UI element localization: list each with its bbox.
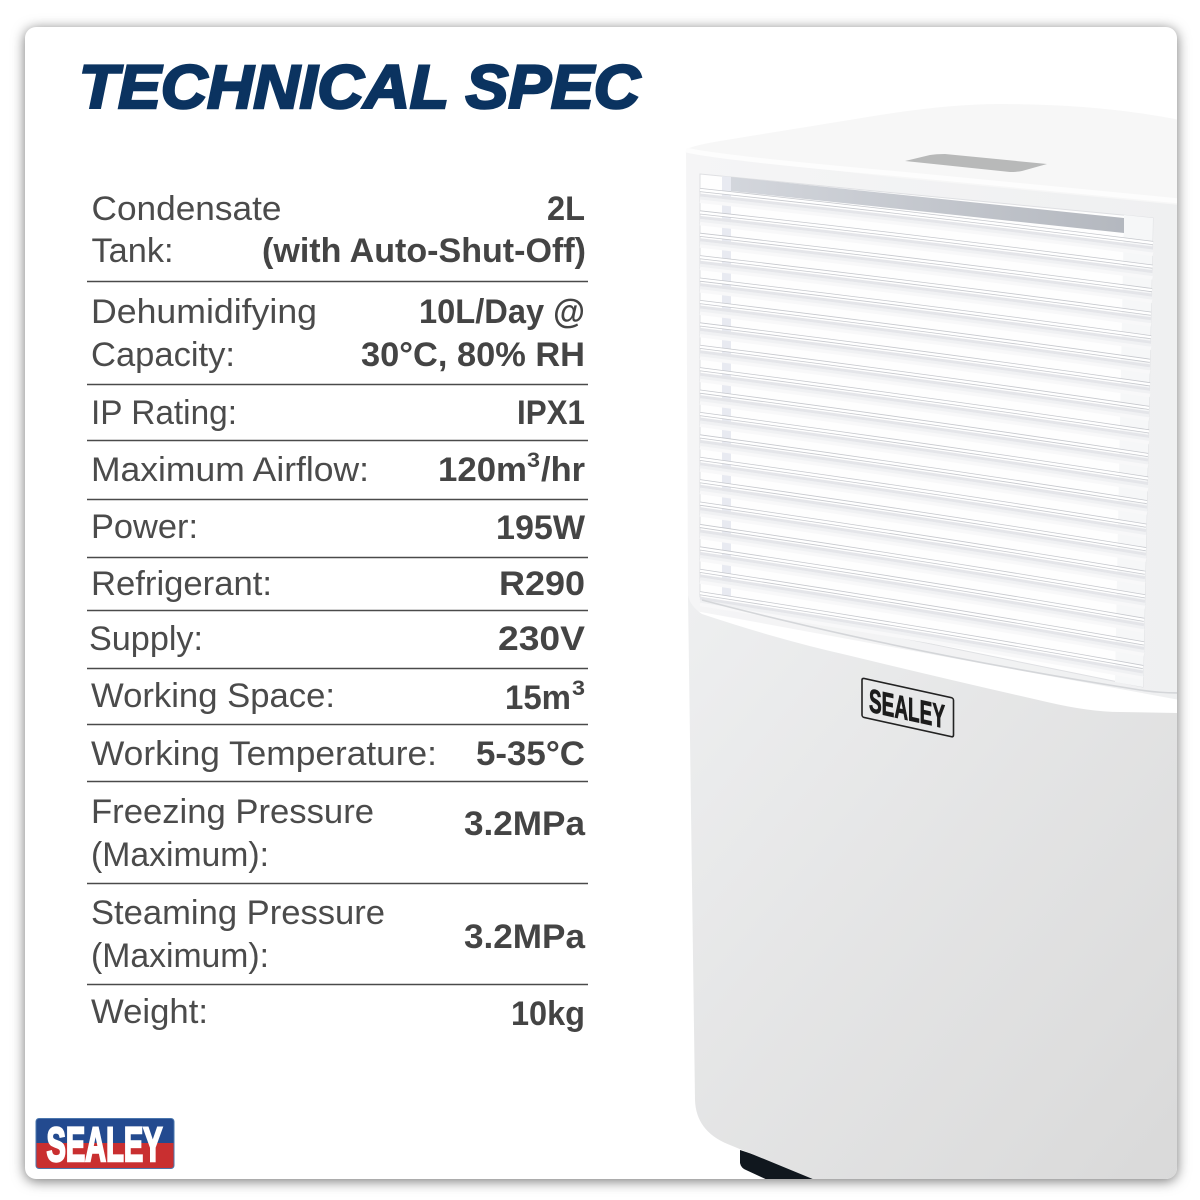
row: supply: 230V — [498, 620, 585, 658]
row: weight: Weight: — [91, 993, 208, 1031]
row: freezing pressure: 3.2MPa — [464, 805, 586, 843]
row: steaming pressure: 3.2MPa — [464, 918, 586, 956]
grille window — [731, 177, 1124, 233]
logo: SEALEY — [36, 1118, 174, 1172]
logo: SEALEY: SEALEY — [46, 1119, 162, 1172]
row: dehumidifying capacity: 30°C, 80% RH — [361, 336, 585, 374]
lid front edge — [687, 151, 810, 168]
row: condensate tank: Tank: — [92, 232, 174, 270]
row: supply: Supply: — [89, 620, 203, 658]
spec table — [87, 190, 588, 1033]
lower body tank — [688, 595, 1180, 1182]
row: working temperature: Working Temperature: — [91, 735, 437, 773]
row: power: 195W — [496, 509, 586, 547]
row: maximum airflow: 3 — [527, 449, 540, 472]
product: white dehumidifier — [686, 104, 1180, 1182]
wheel — [740, 1150, 812, 1179]
row: steaming pressure: (Maximum): — [91, 937, 269, 975]
row: working space: Working Space: — [91, 677, 335, 715]
join ridge — [702, 600, 1180, 693]
row: working temperature — [91, 735, 585, 773]
row: IP rating — [91, 394, 585, 432]
row: refrigerant — [91, 565, 585, 603]
badge: SEALEY on unit — [862, 678, 954, 738]
row: maximum airflow: 120m — [438, 451, 527, 489]
row: freezing pressure: (Maximum): — [91, 836, 269, 874]
row: maximum airflow — [91, 449, 585, 489]
row: working space — [91, 677, 585, 717]
row: working space: 15m — [505, 679, 571, 717]
row: working temperature: 5-35°C — [476, 735, 585, 773]
row: maximum airflow: /hr — [541, 451, 585, 489]
grille frame — [700, 174, 1153, 687]
row: power — [91, 508, 586, 547]
grille slats — [700, 190, 1153, 678]
row: working space: 3 — [572, 677, 585, 700]
row: condensate tank: 2L — [547, 190, 585, 228]
row: dehumidifying capacity: 10L/Day @ — [419, 293, 585, 331]
row: steaming pressure — [91, 894, 586, 975]
row: condensate tank — [92, 190, 586, 270]
row: freezing pressure: Freezing Pressure — [91, 793, 374, 831]
row: IP rating: IPX1 — [517, 394, 585, 432]
row: weight — [91, 993, 585, 1033]
control panel display — [905, 154, 1047, 172]
row: power: Power: — [91, 508, 198, 546]
row: condensate tank: (with Auto-Shut-Off) — [262, 232, 586, 270]
row: IP rating: IP Rating: — [91, 394, 237, 432]
title: TECHNICAL SPEC — [79, 53, 641, 121]
lid top — [686, 104, 1180, 210]
row: dehumidifying capacity: Capacity: — [91, 336, 235, 374]
row: supply — [89, 620, 585, 658]
row: condensate tank: Condensate — [92, 190, 282, 228]
row: refrigerant: R290 — [499, 565, 585, 603]
grille side strips — [722, 176, 731, 600]
row: dehumidifying capacity: Dehumidifying — [91, 293, 317, 331]
row: refrigerant: Refrigerant: — [91, 565, 272, 603]
upper body with grille — [686, 150, 1180, 700]
row: freezing pressure — [91, 793, 586, 874]
row: maximum airflow: Maximum Airflow: — [91, 451, 369, 489]
row: steaming pressure: Steaming Pressure — [91, 894, 385, 932]
badge: SEALEY on unit: SEALEY — [869, 683, 945, 736]
row: dehumidifying capacity — [91, 293, 585, 374]
row: weight: 10kg — [511, 995, 585, 1033]
